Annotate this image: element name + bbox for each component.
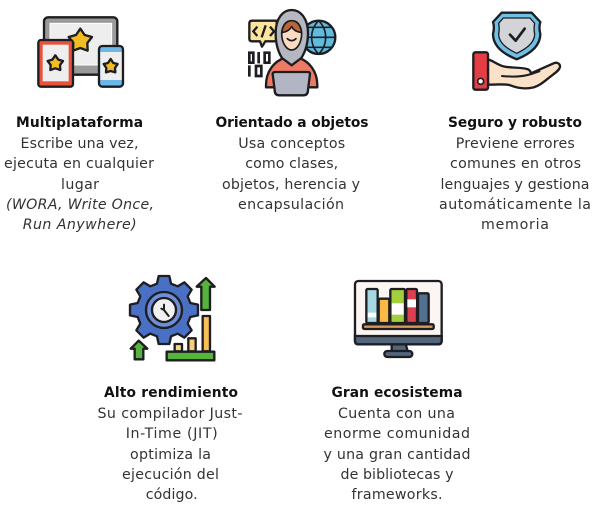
text block: Gran ecosistema description: de bibliotecas y (340, 467, 454, 483)
text block: Alto rendimiento description: In-Time (JIT) (126, 426, 218, 442)
text block: Alto rendimiento description: ejecución del (122, 467, 219, 483)
text block: Orientado a objetos description (222, 136, 360, 213)
text block: Seguro y robusto description: lenguajes y gestiona (440, 177, 590, 193)
text block: Alto rendimiento description (98, 406, 242, 503)
text block: Gran ecosistema description (324, 406, 470, 503)
text block: Gran ecosistema description: Cuenta con una (338, 406, 455, 422)
text block: Multiplataforma description: Run Anywhere) (23, 217, 137, 233)
text block: Seguro y robusto description (439, 136, 591, 233)
panel: Alto rendimiento (98, 276, 242, 503)
text block: Gran ecosistema description: frameworks. (352, 487, 442, 503)
text block: Alto rendimiento description: código. (146, 487, 198, 503)
heading: Alto rendimiento: Alto rendimiento (104, 385, 238, 401)
panel: Seguro y robusto (439, 13, 591, 233)
text block: Multiplataforma description: lugar (61, 177, 99, 193)
heading: Multiplataforma: Multiplataforma (16, 115, 143, 131)
panel: Gran ecosistema (324, 281, 470, 503)
text block: Alto rendimiento description: optimiza la (130, 447, 211, 463)
panel: Multiplataforma (4, 17, 154, 233)
text block: Multiplataforma description: ejecuta en cualquier (4, 156, 154, 172)
text block: Gran ecosistema description: enorme comunidad (324, 426, 470, 442)
text block: Multiplataforma description: Escribe una vez, (20, 136, 138, 152)
icon: developer with laptop (249, 10, 335, 95)
panel: Orientado a objetos (216, 10, 368, 213)
text block: Orientado a objetos description: objetos, herencia y (222, 177, 360, 193)
icon: monitor with books (355, 281, 442, 357)
icon: hand holding shield (473, 13, 560, 90)
text block: Multiplataforma description: (WORA, Write Once, (6, 197, 154, 213)
text block: Gran ecosistema description: y una gran cantidad (324, 447, 470, 463)
icon: gear with clock and growth bars (130, 276, 215, 360)
text block: Alto rendimiento description: Su compilador Just- (98, 406, 242, 422)
text block: Seguro y robusto description: Previene errores (456, 136, 575, 152)
icon: devices with stars (38, 17, 123, 87)
heading: Gran ecosistema: Gran ecosistema (332, 385, 462, 401)
text block: Orientado a objetos description: como clases, (245, 156, 338, 172)
text block: Orientado a objetos description: encapsulación (238, 197, 344, 213)
text block: Multiplataforma description (4, 136, 154, 233)
text block: Orientado a objetos description: Usa conceptos (238, 136, 345, 152)
heading: Seguro y robusto: Seguro y robusto (448, 115, 582, 131)
text block: Seguro y robusto description: automáticamente la (439, 197, 591, 213)
heading: Orientado a objetos: Orientado a objetos (216, 115, 368, 131)
text block: Seguro y robusto description: memoria (481, 217, 549, 233)
text block: Seguro y robusto description: comunes en otros (450, 156, 581, 172)
